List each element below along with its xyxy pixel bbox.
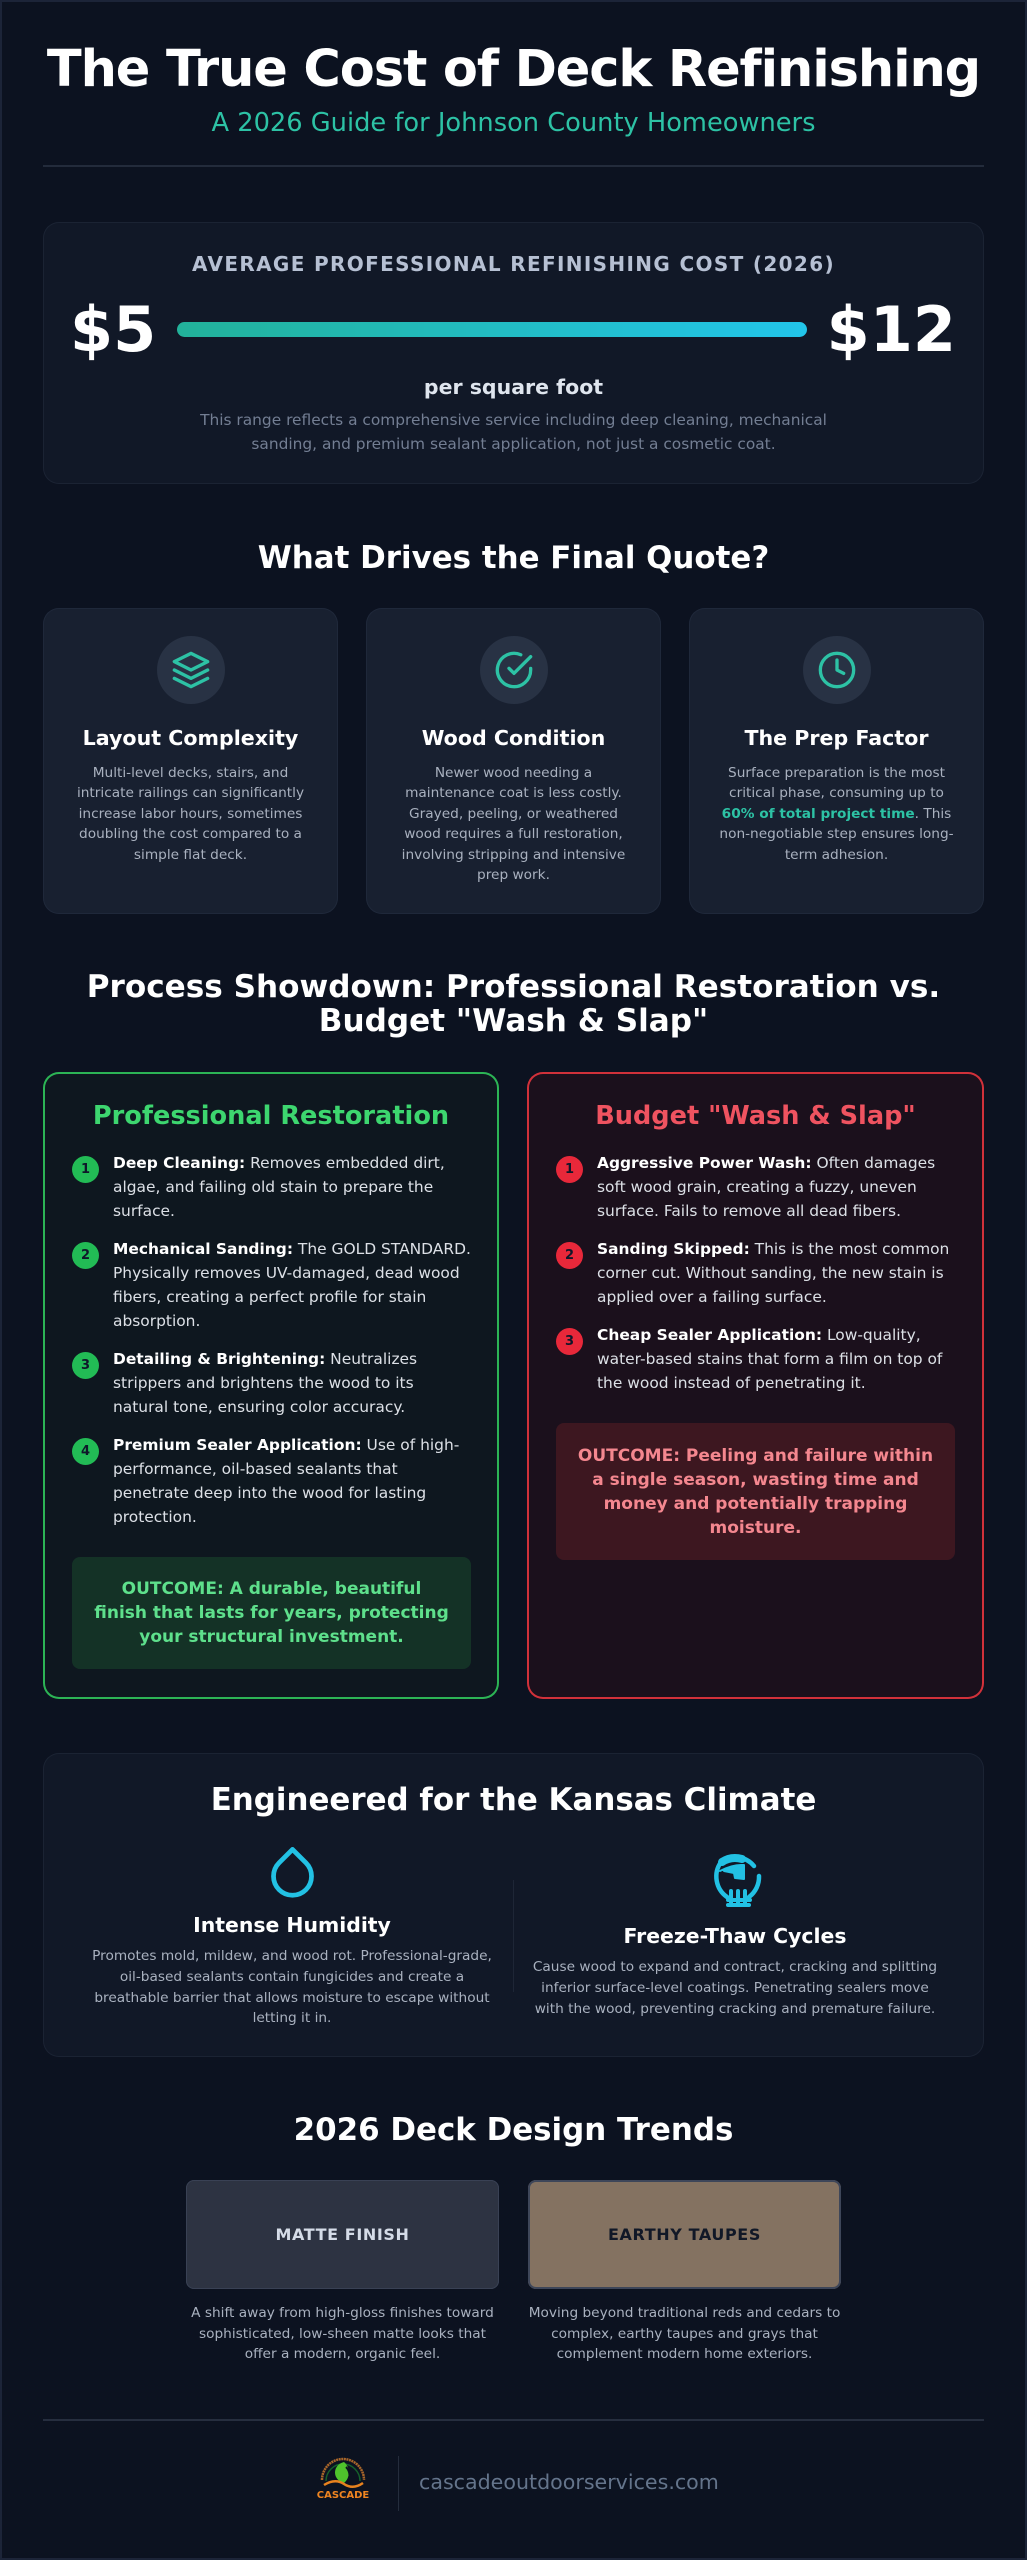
card text: involving stripping and intensive — [402, 847, 625, 863]
heading: design trends: 2026 Deck Design Trends — [294, 2112, 733, 2148]
outcome: professional — [72, 1557, 471, 1669]
step text: natural tone, ensuring color accuracy. — [113, 1398, 405, 1416]
humidity text: oil-based sealants contain fungicides and create a — [120, 1969, 464, 1985]
step text: absorption. — [113, 1312, 200, 1330]
step text: algae, and failing old stain to prepare the — [113, 1178, 433, 1196]
outcome: professional: OUTCOME: A durable, beautiful — [122, 1579, 421, 1599]
number 4: 4 — [81, 1444, 90, 1459]
subtitle: A 2026 Guide for Johnson County Homeowners — [211, 108, 816, 138]
outcome: budget: OUTCOME: Peeling and failure within — [578, 1446, 933, 1466]
number 2: 2 — [81, 1248, 90, 1263]
card title: Layout Complexity — [83, 726, 298, 750]
step text: soft wood grain, creating a fuzzy, uneven — [597, 1178, 917, 1196]
panel: kansas climate — [43, 1753, 984, 2057]
heading: process showdown: Budget "Wash & Slap" — [319, 1003, 708, 1039]
step text — [597, 1154, 935, 1220]
swatch: taupe: EARTHY TAUPES — [608, 2225, 761, 2244]
panel: earthy taupes — [528, 2180, 841, 2362]
card text: non-negotiable step ensures long- — [719, 826, 954, 842]
step 3 — [556, 1326, 943, 1392]
panel: professional restoration — [43, 1072, 499, 1699]
step text: protection. — [113, 1508, 197, 1526]
humidity text: breathable barrier that allows moisture to escape without — [94, 1990, 490, 2006]
step text: Physically removes UV-damaged, dead wood — [113, 1264, 460, 1282]
step text — [113, 1154, 445, 1220]
card text: prep work. — [477, 867, 550, 883]
card title: Wood Condition — [422, 726, 605, 750]
number 3: 3 — [81, 1358, 90, 1373]
icon: freeze thaw — [714, 1854, 762, 1907]
number 1: 1 — [565, 1162, 574, 1177]
number 3: 3 — [565, 1334, 574, 1349]
matte text: sophisticated, low-sheen matte looks that — [199, 2326, 486, 2342]
range bar — [177, 322, 807, 337]
matte text: offer a modern, organic feel. — [245, 2346, 440, 2362]
card text: Surface preparation is the most — [728, 764, 945, 780]
step 4 — [72, 1436, 459, 1526]
step 1 — [72, 1154, 445, 1220]
climate heading: Engineered for the Kansas Climate — [211, 1782, 816, 1818]
step 2 — [556, 1240, 949, 1306]
outcome: budget — [556, 1423, 955, 1560]
humidity text — [92, 1948, 492, 2026]
step text: Aggressive Power Wash: Often damages — [597, 1154, 935, 1172]
freeze thaw text: with the wood, preventing cracking and premature failure. — [535, 2001, 935, 2017]
title: The True Cost of Deck Refinishing — [47, 40, 980, 98]
freeze thaw text — [533, 1959, 937, 2017]
panel: matte finish — [186, 2180, 499, 2362]
matte text — [191, 2305, 494, 2362]
number 2 — [72, 1242, 99, 1269]
panel heading: Professional Restoration — [93, 1101, 449, 1131]
freeze thaw title: Freeze-Thaw Cycles — [624, 1924, 846, 1948]
number 1 — [72, 1156, 99, 1183]
step text — [597, 1240, 949, 1306]
description — [200, 411, 827, 453]
taupe text: complex, earthy taupes and grays that — [551, 2326, 818, 2342]
card text — [77, 764, 304, 863]
number 2: 2 — [565, 1248, 574, 1263]
number 2 — [556, 1242, 583, 1269]
outcome: professional: finish that lasts for years, protecting — [94, 1603, 449, 1623]
icon: clock — [802, 636, 870, 704]
heading: process showdown: Process Showdown: Professional Restoration vs. — [87, 969, 940, 1005]
step 2 — [72, 1240, 471, 1330]
step text: the wood instead of penetrating it. — [597, 1374, 866, 1392]
number 3 — [556, 1328, 583, 1355]
taupe text — [529, 2305, 840, 2362]
low price: $5 — [70, 292, 156, 366]
panel: budget wash and slap — [527, 1072, 984, 1699]
card text: maintenance coat is less costly. — [405, 785, 622, 801]
card text: Grayed, peeling, or weathered — [409, 806, 618, 822]
card text: wood requires a full restoration, — [404, 826, 623, 842]
matte text: A shift away from high-gloss finishes toward — [191, 2305, 494, 2321]
step text: Deep Cleaning: Removes embedded dirt, — [113, 1154, 445, 1172]
high price: $12 — [827, 292, 956, 366]
step text: Sanding Skipped: This is the most common — [597, 1240, 949, 1258]
step text — [113, 1350, 417, 1416]
step text: Detailing & Brightening: Neutralizes — [113, 1350, 417, 1368]
number 3 — [72, 1352, 99, 1379]
card text — [719, 764, 954, 863]
card text: Newer wood needing a — [435, 764, 592, 780]
step text — [113, 1436, 459, 1526]
swatch: matte — [186, 2180, 499, 2289]
freeze thaw text: Cause wood to expand and contract, cracking and splitting — [533, 1959, 937, 1975]
icon: droplet — [271, 1847, 314, 1898]
outcome: budget: a single season, wasting time and — [592, 1470, 919, 1490]
icon: layers — [156, 636, 224, 704]
outcome: professional: your structural investment. — [139, 1627, 404, 1647]
outcome: budget: moisture. — [710, 1518, 801, 1538]
card text: simple flat deck. — [134, 847, 247, 863]
humidity title: Intense Humidity — [193, 1912, 391, 1936]
card text: Multi-level decks, stairs, and — [93, 764, 288, 780]
description: This range reflects a comprehensive service including deep cleaning, mechanical — [200, 411, 827, 429]
number 1 — [556, 1156, 583, 1183]
humidity text: letting it in. — [253, 2010, 331, 2026]
card title: The Prep Factor — [744, 726, 929, 750]
card text: doubling the cost compared to a — [79, 826, 302, 842]
description: sanding, and premium sealant application, not just a cosmetic coat. — [251, 435, 776, 453]
logo: cascade: CASCADE — [317, 2490, 369, 2501]
card text: critical phase, consuming up to — [729, 785, 944, 801]
card text: term adhesion. — [785, 847, 888, 863]
website url: cascadeoutdoorservices.com — [419, 2470, 719, 2494]
panel: prep factor — [689, 608, 984, 914]
swatch: taupe — [528, 2180, 841, 2289]
unit: per square foot — [424, 374, 603, 398]
panel heading: Budget "Wash & Slap" — [595, 1101, 916, 1131]
step text: corner cut. Without sanding, the new stain is — [597, 1264, 944, 1282]
number 4 — [72, 1438, 99, 1465]
card text: increase labor hours, sometimes — [79, 806, 302, 822]
card text — [402, 764, 625, 883]
heading: what drives the quote: What Drives the Final Quote? — [258, 540, 769, 576]
logo: cascade — [317, 2458, 369, 2501]
panel: average cost — [43, 222, 984, 484]
panel: wood condition — [366, 608, 661, 914]
step text — [597, 1326, 943, 1392]
step text: penetrate deep into the wood for lasting — [113, 1484, 426, 1502]
step text: Mechanical Sanding: The GOLD STANDARD. — [113, 1240, 471, 1258]
step text — [113, 1240, 471, 1330]
step text: applied over a failing surface. — [597, 1288, 827, 1306]
step 1 — [556, 1154, 935, 1220]
taupe text: Moving beyond traditional reds and cedars to — [529, 2305, 840, 2321]
freeze thaw text: inferior surface-level coatings. Penetrating sealers move — [541, 1980, 929, 1996]
step text: strippers and brightens the wood to its — [113, 1374, 414, 1392]
icon: check circle — [480, 636, 548, 704]
number 1: 1 — [81, 1162, 90, 1177]
step text: Premium Sealer Application: Use of high- — [113, 1436, 459, 1454]
card text: 60% of total project time. This — [722, 806, 951, 822]
humidity text: Promotes mold, mildew, and wood rot. Professional-grade, — [92, 1948, 492, 1964]
step 3 — [72, 1350, 417, 1416]
swatch: matte: MATTE FINISH — [275, 2225, 410, 2244]
panel: layout complexity — [43, 608, 338, 914]
step text: surface. Fails to remove all dead fibers. — [597, 1202, 901, 1220]
taupe text: complement modern home exteriors. — [557, 2346, 812, 2362]
step text: Cheap Sealer Application: Low-quality, — [597, 1326, 921, 1344]
outcome: budget: money and potentially trapping — [604, 1494, 907, 1514]
card text: intricate railings can significantly — [77, 785, 304, 801]
step text: surface. — [113, 1202, 175, 1220]
step text: performance, oil-based sealants that — [113, 1460, 398, 1478]
step text: water-based stains that form a film on top of — [597, 1350, 942, 1368]
cost label: AVERAGE PROFESSIONAL REFINISHING COST (2026) — [192, 252, 835, 276]
step text: fibers, creating a perfect profile for stain — [113, 1288, 426, 1306]
heading: process showdown — [87, 969, 940, 1039]
